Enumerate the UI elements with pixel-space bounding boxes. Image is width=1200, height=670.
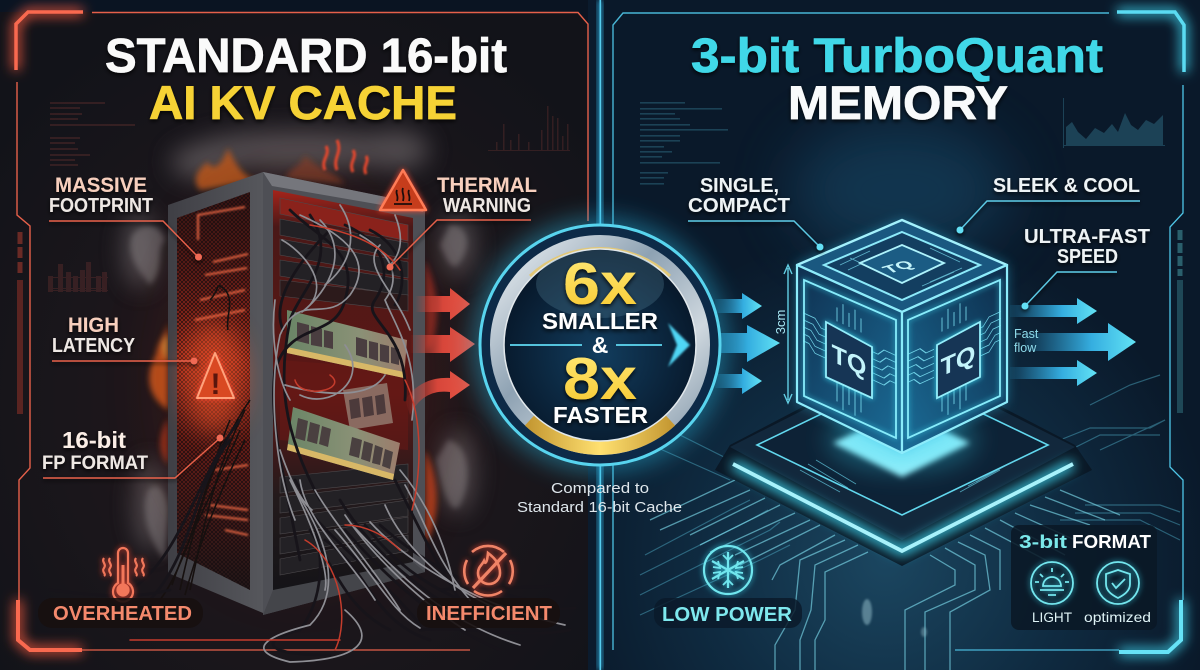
badge: low power: LOW POWER [662, 604, 793, 626]
center badge: comparison: 8x [563, 346, 637, 412]
caption: compared to: Compared to [551, 480, 649, 497]
icon: light [1031, 562, 1073, 604]
flow arrows: left of cube [700, 293, 780, 394]
center badge: comparison: SMALLER [542, 308, 658, 334]
panel: 3-bit format: FORMAT [1072, 532, 1151, 552]
circuit traces: right panel [640, 375, 1180, 615]
faint data: left panel [48, 102, 570, 292]
cube top face [797, 220, 1007, 312]
server units [280, 198, 408, 575]
cube right face [902, 265, 1007, 453]
divider line [598, 0, 602, 670]
title: right: 3-bit TurboQuant [691, 30, 1103, 83]
center badge: comparison: 6x [563, 251, 637, 317]
rack front frame [263, 172, 425, 615]
server rack: tangled cables and RAM [50, 172, 575, 662]
title: right [691, 30, 1103, 129]
label: high latency [52, 314, 198, 364]
label: single compact: SINGLE, [700, 175, 779, 197]
badge: inefficient [417, 598, 560, 628]
title: right: MEMORY [788, 76, 1008, 129]
heat arrows: left [405, 288, 475, 415]
faint data: right panel [640, 98, 1165, 185]
RAM module: middle back [343, 383, 393, 430]
label: thermal warning: WARNING [443, 195, 531, 217]
dimension: 3cm [773, 265, 792, 403]
label: fast flow: flow [1014, 341, 1037, 355]
label: massive footprint [49, 174, 202, 260]
icon: inefficient [464, 546, 513, 596]
cube right face: TQ [941, 338, 975, 383]
panel frame: right [613, 12, 1184, 652]
label: high latency: LATENCY [52, 335, 136, 357]
title: left [105, 30, 507, 129]
badge: overheated [38, 598, 203, 628]
panel: 3-bit format: 3-bit [1019, 532, 1067, 552]
title: left: AI KV CACHE [149, 76, 457, 129]
label: ultra-fast speed: ULTRA-FAST [1024, 226, 1150, 248]
icon: thermometer [103, 548, 144, 602]
label: 16-bit FP format: 16-bit [62, 427, 126, 453]
caption: compared to: Standard 16-bit Cache [517, 499, 682, 516]
cables [50, 205, 575, 662]
icon: warning triangle, side panel: ! [210, 368, 220, 401]
TQ cube [797, 220, 1007, 453]
icon: shield [1097, 562, 1139, 604]
label: 16-bit FP format [42, 427, 224, 478]
cube top face: TQ [878, 258, 918, 276]
glow under cube [827, 408, 977, 477]
panel: 3-bit format: optimized [1084, 609, 1151, 625]
panel: 3-bit format [1011, 525, 1157, 630]
icon: thermal warning triangle [380, 170, 426, 210]
RAM module: top [287, 310, 407, 378]
icon: snowflake [704, 546, 752, 594]
dimension: 3cm: 3cm [773, 310, 788, 334]
cube left face: TQ [832, 338, 866, 383]
panel frame: left [16, 12, 588, 650]
circuit traces: under chip [650, 480, 1120, 670]
label: fast flow [1014, 327, 1039, 355]
label: 16-bit FP format: FP FORMAT [42, 453, 148, 474]
label: massive footprint: MASSIVE [55, 174, 147, 197]
label: fast flow: Fast [1014, 327, 1039, 341]
cube left face [797, 265, 902, 453]
center badge: comparison: & [592, 332, 608, 358]
label: ultra-fast speed [1022, 226, 1150, 310]
icon: heat waves [324, 140, 367, 174]
label: sleek and cool: SLEEK & COOL [993, 175, 1140, 197]
rack left side panel [160, 172, 263, 613]
title: left: STANDARD 16-bit [105, 30, 507, 83]
label: massive footprint: FOOTPRINT [49, 195, 153, 217]
badge: overheated: OVERHEATED [53, 603, 192, 625]
center badge: comparison [472, 217, 728, 473]
icon: warning triangle, side panel [197, 353, 234, 401]
label: ultra-fast speed: SPEED [1057, 246, 1118, 268]
label: thermal warning [386, 174, 537, 270]
center badge: comparison: FASTER [553, 402, 648, 428]
label: thermal warning: THERMAL [437, 174, 537, 197]
panel: 3-bit format: LIGHT [1032, 610, 1072, 625]
smoke and flames [124, 130, 474, 560]
label: sleek and cool [956, 175, 1140, 234]
RAM module: lower [287, 407, 400, 480]
badge: inefficient: INEFFICIENT [426, 603, 552, 625]
label: high latency: HIGH [68, 314, 119, 337]
chip base [715, 355, 1092, 566]
badge: low power [654, 598, 802, 628]
caption: compared to [517, 480, 682, 516]
label: single compact [688, 175, 824, 250]
flow arrows: right of cube [1010, 298, 1136, 386]
label: single compact: COMPACT [688, 195, 790, 217]
